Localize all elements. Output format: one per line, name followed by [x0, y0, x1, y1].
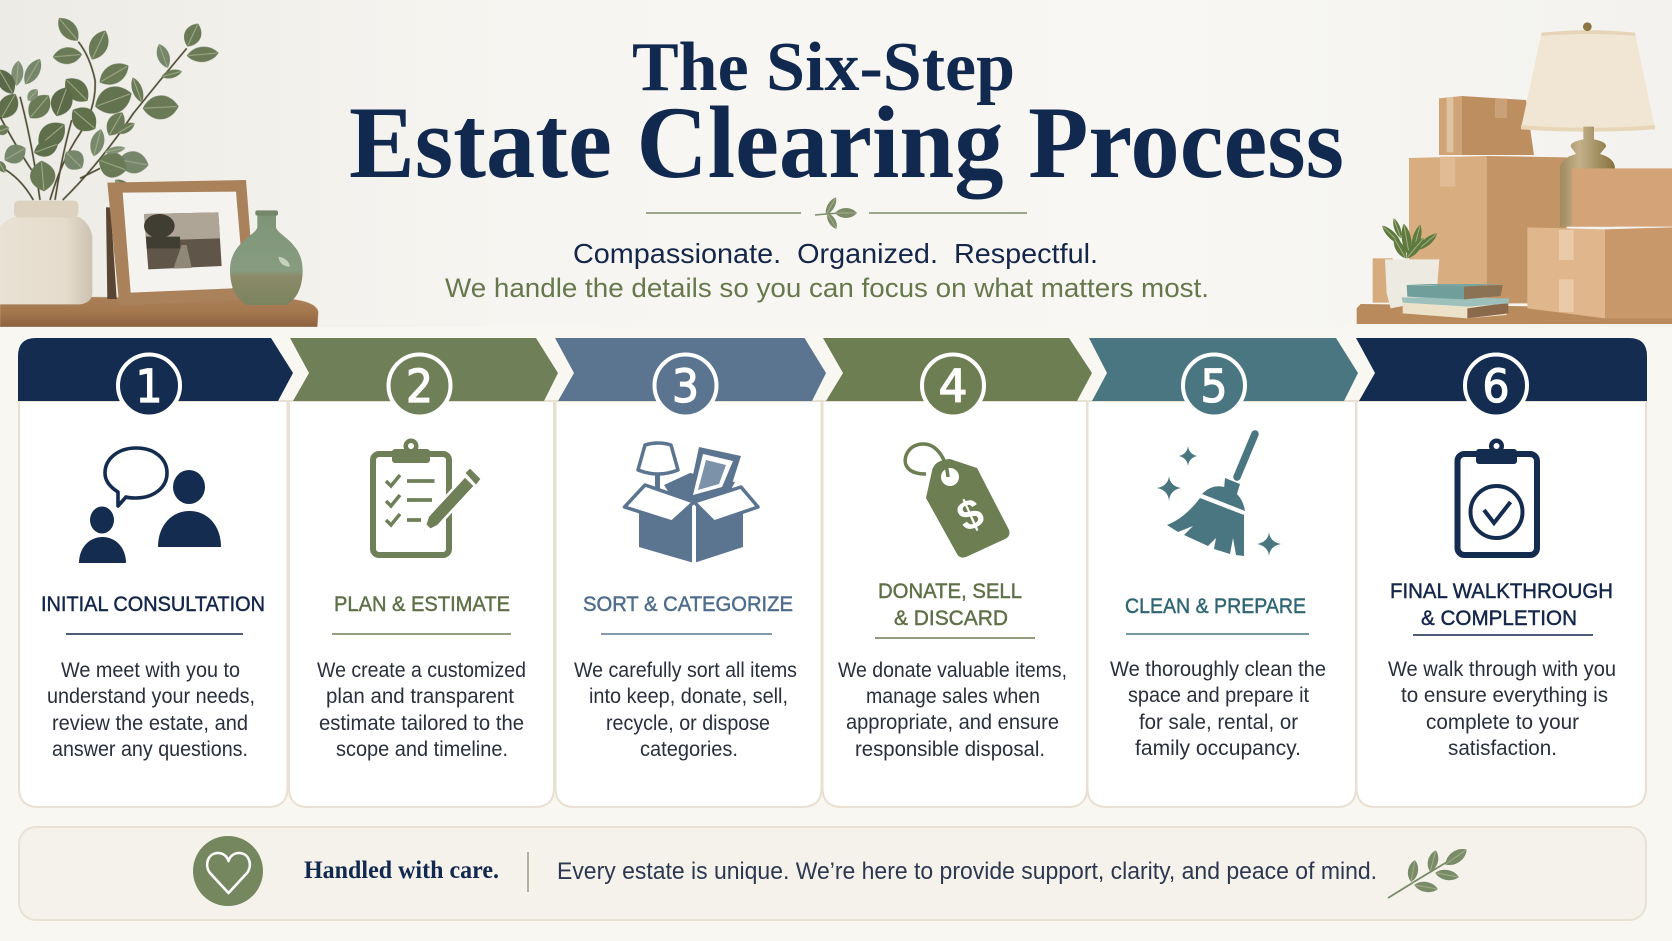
lamp shade	[1521, 30, 1655, 131]
description: for sale, rental, or	[1139, 711, 1298, 734]
number 6: 6	[1482, 360, 1510, 413]
chevron 1	[18, 338, 293, 401]
description	[1388, 658, 1616, 760]
number 3: 3	[672, 360, 699, 413]
divider with leaf ornament	[646, 196, 1027, 231]
panel: step 6 final walkthrough and completion	[1356, 338, 1647, 807]
leaves	[0, 13, 219, 193]
number 1	[118, 354, 180, 416]
shelf right	[1357, 304, 1672, 324]
heading: & COMPLETION	[1421, 606, 1577, 630]
description: recycle, or dispose	[606, 712, 770, 735]
number 4	[922, 354, 984, 416]
panel: step 4 donate sell and discard	[822, 338, 1092, 807]
description: review the estate, and	[52, 712, 248, 735]
description	[317, 659, 526, 761]
footer message: Every estate is unique. We’re here to provide support, clarity, and peace of mind.	[557, 858, 1377, 885]
top box	[1439, 96, 1462, 155]
icon: heart badge	[193, 836, 263, 906]
description: appropriate, and ensure	[846, 711, 1059, 734]
title line 2: Estate Clearing Process	[349, 86, 1344, 200]
green vase	[230, 215, 303, 305]
shelf left	[0, 296, 318, 327]
chevron 5	[1089, 338, 1358, 401]
icon: leaf sprig	[1388, 845, 1470, 898]
description: We donate valuable items,	[838, 659, 1067, 682]
heading	[1390, 579, 1613, 630]
description	[1110, 658, 1326, 760]
heading: DONATE, SELL	[878, 579, 1022, 603]
heading: INITIAL CONSULTATION	[41, 592, 265, 616]
chevron 2	[290, 338, 558, 401]
number 5: 5	[1200, 360, 1228, 413]
front box	[1527, 227, 1605, 318]
panel: step 5 clean and prepare	[1088, 338, 1358, 807]
title	[349, 29, 1344, 200]
description: into keep, donate, sell,	[589, 685, 788, 708]
description: We create a customized	[317, 659, 526, 682]
large box	[1409, 156, 1487, 303]
jar vase	[0, 217, 92, 304]
chevron 6	[1356, 338, 1647, 401]
number 2	[388, 354, 450, 416]
stems	[0, 42, 187, 200]
description	[47, 659, 255, 761]
panel: step 1 initial consultation	[18, 338, 293, 807]
description	[838, 659, 1067, 761]
potted plant	[1385, 259, 1439, 308]
title line 1: The Six-Step	[632, 29, 1015, 106]
chevron 3	[555, 338, 826, 401]
number 1: 1	[136, 360, 162, 413]
number 4: 4	[938, 360, 968, 413]
right stacked box	[1572, 168, 1672, 227]
heading	[878, 579, 1022, 630]
small rear box	[1373, 258, 1393, 303]
description: plan and transparent	[326, 685, 514, 708]
books	[1403, 302, 1508, 318]
tagline: Compassionate. Organized. Respectful.	[573, 238, 1098, 269]
number 6	[1465, 354, 1527, 416]
heading: FINAL WALKTHROUGH	[1390, 579, 1613, 603]
number 3	[654, 354, 716, 416]
panel: footer banner	[19, 827, 1646, 920]
description: We walk through with you	[1388, 658, 1616, 681]
description: responsible disposal.	[855, 738, 1045, 761]
description: We thoroughly clean the	[1110, 658, 1326, 681]
heading: CLEAN & PREPARE	[1125, 594, 1306, 618]
description	[574, 659, 797, 761]
description: complete to your	[1426, 711, 1579, 734]
panel: step 3 sort and categorize	[555, 338, 826, 807]
photo: plant, vase, frame and shelf	[0, 13, 318, 327]
description: estimate tailored to the	[319, 712, 524, 735]
description: We meet with you to	[61, 659, 240, 682]
description: family occupancy.	[1135, 737, 1301, 760]
heading: SORT & CATEGORIZE	[583, 592, 793, 616]
lamp base	[1560, 127, 1615, 227]
heading: & DISCARD	[894, 606, 1008, 630]
description: satisfaction.	[1448, 737, 1557, 760]
description: We carefully sort all items	[574, 659, 797, 682]
icon: broom with sparkles	[1157, 434, 1281, 556]
description: scope and timeline.	[336, 738, 508, 761]
description: categories.	[640, 738, 738, 761]
subtitle: We handle the details so you can focus on what matters most.	[445, 273, 1209, 303]
icon: two people talking	[79, 448, 221, 563]
number 5	[1183, 354, 1245, 416]
icon: open box with lamp and frame	[624, 443, 758, 563]
panel: step 2 plan and estimate	[289, 338, 558, 807]
icon: clipboard and pencil	[373, 438, 479, 555]
number 2: 2	[406, 360, 433, 413]
icon: clipboard with check	[1458, 438, 1537, 555]
description: to ensure everything is	[1401, 684, 1608, 707]
description: space and prepare it	[1128, 684, 1309, 707]
description: manage sales when	[866, 685, 1040, 708]
chevron 4	[823, 338, 1092, 401]
icon: price tag: $	[950, 488, 990, 541]
header wall background	[0, 0, 1672, 327]
description: understand your needs,	[47, 685, 255, 708]
picture frame	[106, 207, 117, 299]
icon: price tag	[905, 444, 1010, 558]
footer heading: Handled with care.	[304, 857, 499, 884]
description: answer any questions.	[52, 738, 248, 761]
heading: PLAN & ESTIMATE	[334, 592, 510, 616]
photo: moving boxes, lamp and books	[1357, 22, 1672, 324]
